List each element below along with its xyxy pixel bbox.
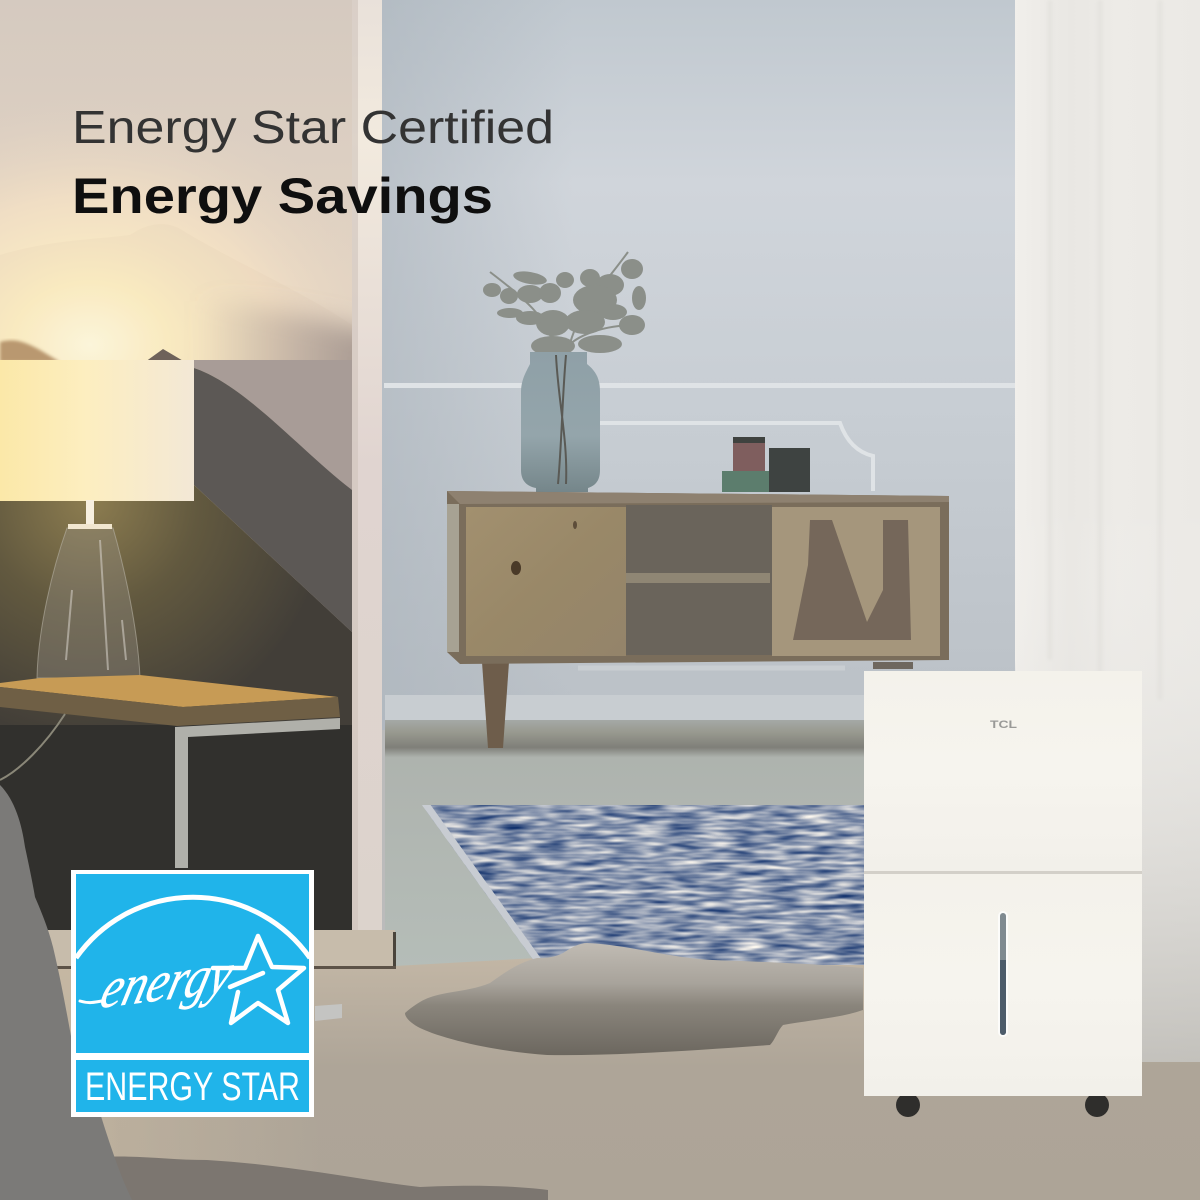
logo script word: energy xyxy=(95,940,241,1021)
sideboard legs xyxy=(482,662,509,748)
icon: energy star logo xyxy=(71,870,314,1117)
heading line 2: Energy Savings xyxy=(72,168,493,224)
lamp glass base xyxy=(37,524,140,678)
heading line 1: Energy Star Certified xyxy=(72,101,554,153)
dehumidifier tank xyxy=(864,874,1142,1096)
curtain right xyxy=(1015,0,1200,1062)
lamp xyxy=(0,360,194,678)
lamp stem xyxy=(86,500,94,528)
wall moulding xyxy=(384,386,1015,668)
sideboard xyxy=(447,491,949,748)
floor lower xyxy=(0,958,1200,1200)
baseboard xyxy=(385,695,1020,720)
background: centre wall xyxy=(381,0,1021,730)
brand logo: TCL xyxy=(990,719,1017,731)
plant xyxy=(483,252,646,356)
logo wordmark: ENERGY STAR xyxy=(85,1065,300,1109)
dark rug bottom xyxy=(103,1157,548,1200)
logo star xyxy=(213,936,304,1023)
title xyxy=(72,101,554,224)
lamp shade xyxy=(0,360,194,501)
dehumidifier xyxy=(864,671,1142,1117)
pillar base and skirting xyxy=(48,930,396,1021)
side table xyxy=(0,675,340,868)
sideboard body xyxy=(447,491,949,664)
floor upper xyxy=(385,720,1025,970)
vase xyxy=(521,352,600,492)
blanket xyxy=(0,785,132,1200)
blue patterned rug xyxy=(422,805,864,965)
panel: left mural wall xyxy=(0,0,380,930)
sideboard left door xyxy=(466,507,626,656)
sideboard right door xyxy=(772,507,940,656)
boxes on sideboard xyxy=(722,437,810,492)
dehumidifier upper body xyxy=(864,671,1142,872)
pillar xyxy=(352,0,382,932)
sideboard open shelves xyxy=(626,505,772,655)
fur rug xyxy=(405,943,863,1055)
water level gauge xyxy=(998,911,1008,1037)
logo arc xyxy=(76,897,310,958)
wheels xyxy=(896,1093,1109,1117)
